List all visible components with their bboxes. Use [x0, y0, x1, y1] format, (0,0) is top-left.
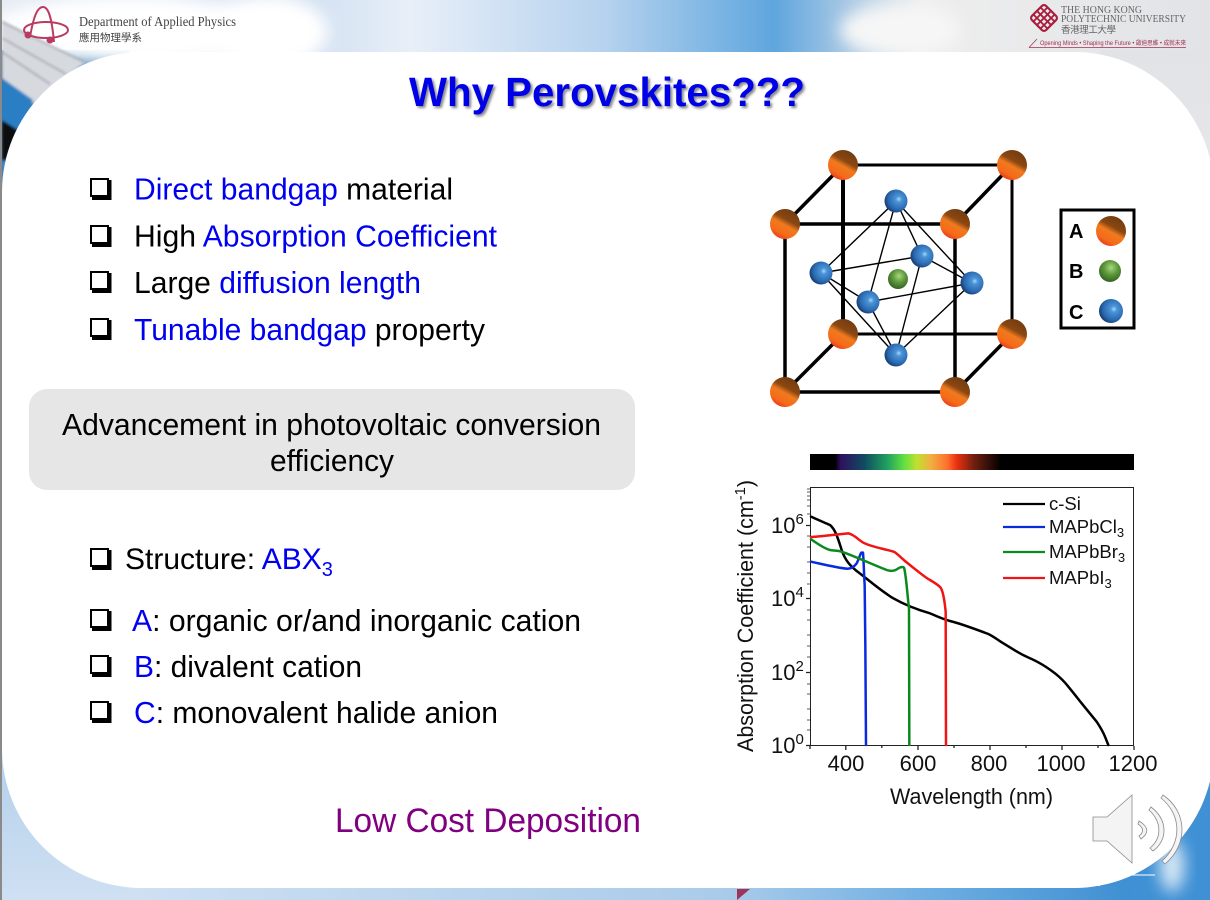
x tick labels: 1200 — [1109, 751, 1157, 776]
spheres: A cations — [770, 150, 1027, 407]
chart: absorption coefficient vs wavelength — [732, 480, 1157, 809]
legend: chart series: MAPbI — [1049, 567, 1105, 588]
text: university name Chinese: 香港理工大學 — [1061, 24, 1116, 36]
y tick labels: 2 — [795, 658, 804, 675]
y tick labels — [771, 511, 804, 758]
text: department name: Department of Applied Physics — [79, 14, 236, 29]
x tick labels: 1000 — [1037, 751, 1085, 776]
y tick labels: 10 — [771, 513, 795, 538]
y tick labels: 10 — [771, 586, 795, 611]
legend: chart series: 3 — [1105, 576, 1112, 591]
y tick labels: 4 — [795, 584, 804, 601]
octahedron edges — [821, 201, 972, 355]
legend: chart series: 3 — [1117, 525, 1124, 540]
sphere: B cation — [888, 269, 908, 289]
title: Why Perovskites??? — [409, 69, 805, 115]
y tick labels: 6 — [795, 511, 804, 528]
legend: crystal sites: B — [1069, 261, 1083, 283]
x tick labels: 400 — [828, 751, 864, 776]
bullet: B: B: divalent cation — [134, 650, 362, 684]
y axis title: ) — [733, 480, 758, 487]
y axis title: Absorption Coefficient (cm — [733, 494, 758, 752]
text block: perovskite properties — [91, 172, 498, 347]
text: university name: THE HONG KONG — [1061, 4, 1142, 16]
diagram: perovskite crystal structure — [770, 150, 1027, 407]
curve: c-Si — [811, 517, 1108, 745]
bullet: A: A: organic or/and inorganic cation — [132, 604, 581, 638]
legend: crystal sites: A — [1069, 221, 1083, 243]
icon: speaker — [1093, 795, 1182, 864]
icon: PolyU lattice — [1030, 4, 1058, 32]
logo: Department of Applied Physics — [24, 7, 236, 44]
legend: chart series: MAPbCl — [1049, 516, 1117, 537]
legend: chart series — [1003, 493, 1125, 591]
x axis title: Wavelength (nm) — [890, 784, 1053, 809]
text: department name Chinese: 應用物理學系 — [79, 31, 142, 44]
y tick labels: 0 — [795, 731, 804, 748]
bullet: structure: Structure: ABX — [125, 543, 322, 576]
y axis title: -1 — [732, 487, 749, 500]
x tick labels: 800 — [971, 751, 1007, 776]
cube edges — [785, 165, 1012, 392]
legend: crystal sites: C — [1069, 302, 1083, 324]
bullet: direct bandgap: Direct bandgap material — [134, 172, 453, 206]
curve: MAPbI3 — [811, 533, 946, 745]
axes frame — [806, 488, 1134, 750]
text: university name line 2: POLYTECHNIC UNIVERSITY — [1061, 13, 1186, 25]
curve: MAPbCl3 — [811, 553, 866, 745]
x tick labels — [828, 751, 1157, 776]
curve: MAPbBr3 — [811, 539, 909, 745]
text: low cost deposition: Low Cost Deposition — [335, 802, 641, 840]
legend: chart series: c-Si — [1049, 493, 1081, 514]
bullet: C: C: monovalent halide anion — [134, 696, 498, 730]
logo: Hong Kong Polytechnic University — [1029, 4, 1186, 48]
bullet: diffusion length: Large diffusion length — [134, 266, 421, 300]
icon: atom — [24, 7, 68, 42]
callout: photovoltaic conversion efficiency: Advancement in photovoltaic conversion — [62, 408, 601, 442]
legend: crystal sites — [1061, 210, 1134, 328]
text block: ABX3 structure — [91, 543, 581, 730]
bullet: structure: 3 — [322, 559, 333, 581]
bullet: absorption coefficient: High Absorption Coefficient — [134, 220, 498, 254]
spheres: C anions — [810, 190, 984, 366]
legend: chart series: 3 — [1118, 550, 1125, 565]
callout: photovoltaic conversion efficiency: efficiency — [270, 444, 395, 478]
legend: chart series: MAPbBr — [1049, 541, 1118, 562]
y tick labels: 10 — [771, 660, 795, 685]
callout: photovoltaic conversion efficiency — [29, 389, 635, 490]
bullet: tunable bandgap: Tunable bandgap property — [134, 313, 486, 347]
text: motto: Opening Minds • Shaping the Future • 啟迪思維 • 成就未來 — [1040, 39, 1186, 47]
x tick labels: 600 — [900, 751, 936, 776]
curves — [811, 517, 1108, 745]
y tick labels: 10 — [771, 733, 795, 758]
spectrum colour bar — [810, 454, 1134, 470]
